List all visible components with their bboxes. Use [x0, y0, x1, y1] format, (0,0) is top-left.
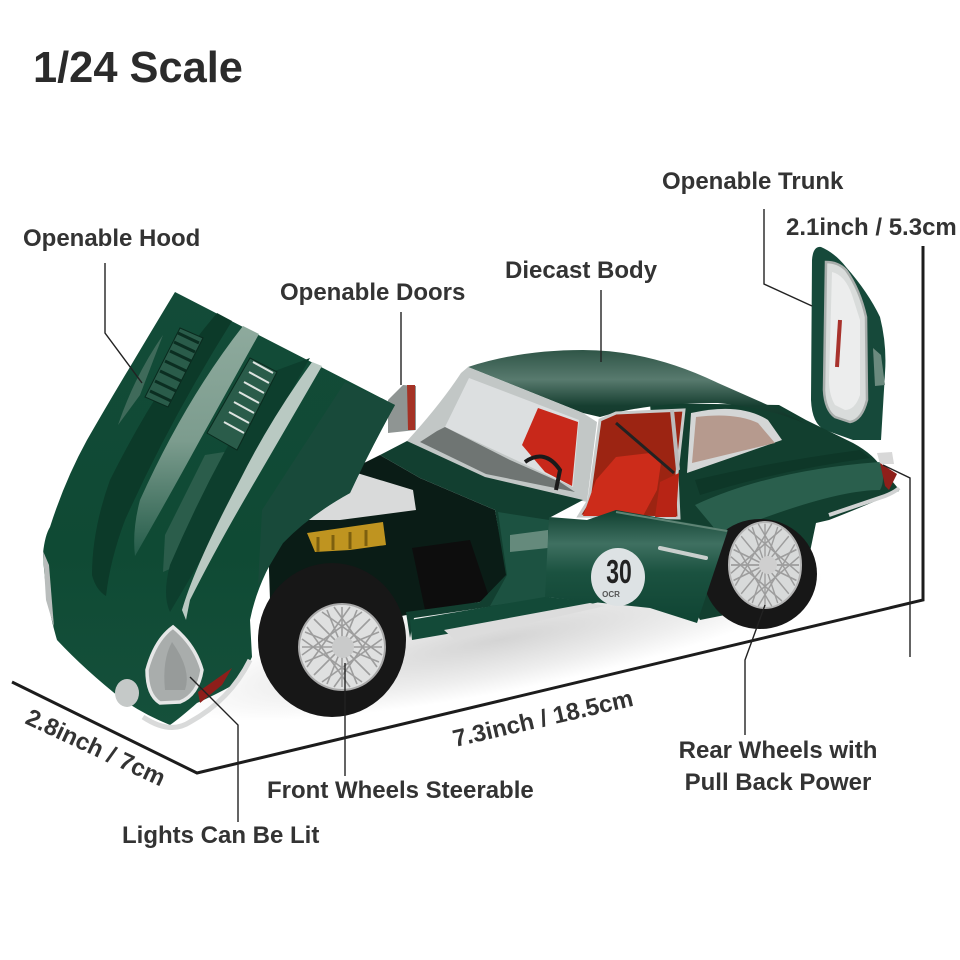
- side headlight: [43, 551, 54, 627]
- front headlight: [147, 627, 202, 703]
- hood vents: [145, 328, 277, 450]
- label: rear wheels: Pull Back Power: [685, 769, 871, 796]
- door behind hood: [388, 385, 416, 433]
- mid body panel: [380, 441, 583, 638]
- windscreen glass: [445, 378, 579, 487]
- label: openable trunk: Openable Trunk: [662, 168, 844, 195]
- length dimension: 7.3inch / 18.5cm: [450, 685, 636, 753]
- label: diecast body: Diecast Body: [505, 257, 658, 284]
- callout lines: [105, 209, 910, 822]
- side opening interior: [579, 410, 684, 518]
- label: rear wheels: Rear Wheels with: [679, 737, 877, 764]
- label: openable doors: Openable Doors: [280, 279, 465, 306]
- front wheel: [258, 563, 406, 717]
- floor shadow: [166, 526, 834, 754]
- trunk lid: [811, 247, 885, 440]
- bumper: [143, 660, 250, 727]
- quarter window: [687, 409, 782, 473]
- engine bay: [268, 455, 507, 620]
- rear wheel: [703, 519, 817, 629]
- roof: [468, 350, 806, 424]
- dimension lines: [12, 246, 923, 773]
- marker light: [115, 679, 139, 707]
- car: [43, 247, 899, 727]
- width dimension: 2.8inch / 7cm: [21, 704, 170, 792]
- tail light: [877, 452, 897, 490]
- label: front wheels: Front Wheels Steerable: [267, 777, 534, 804]
- indicator light: [198, 668, 232, 703]
- number roundel: OCR: [602, 590, 620, 599]
- label: lights: Lights Can Be Lit: [122, 822, 319, 849]
- windscreen frame: [407, 367, 597, 502]
- sill: [410, 597, 605, 640]
- label: openable hood: Openable Hood: [23, 225, 200, 252]
- rear body: [650, 403, 899, 620]
- dash: [420, 427, 575, 492]
- door: [545, 510, 728, 623]
- seat through windscreen: [522, 408, 578, 490]
- hood: [43, 292, 395, 727]
- number roundel: 30: [606, 554, 632, 591]
- title: 1/24 Scale: [33, 44, 243, 92]
- number roundel: [591, 548, 645, 606]
- height dimension: 2.1inch / 5.3cm: [786, 214, 957, 241]
